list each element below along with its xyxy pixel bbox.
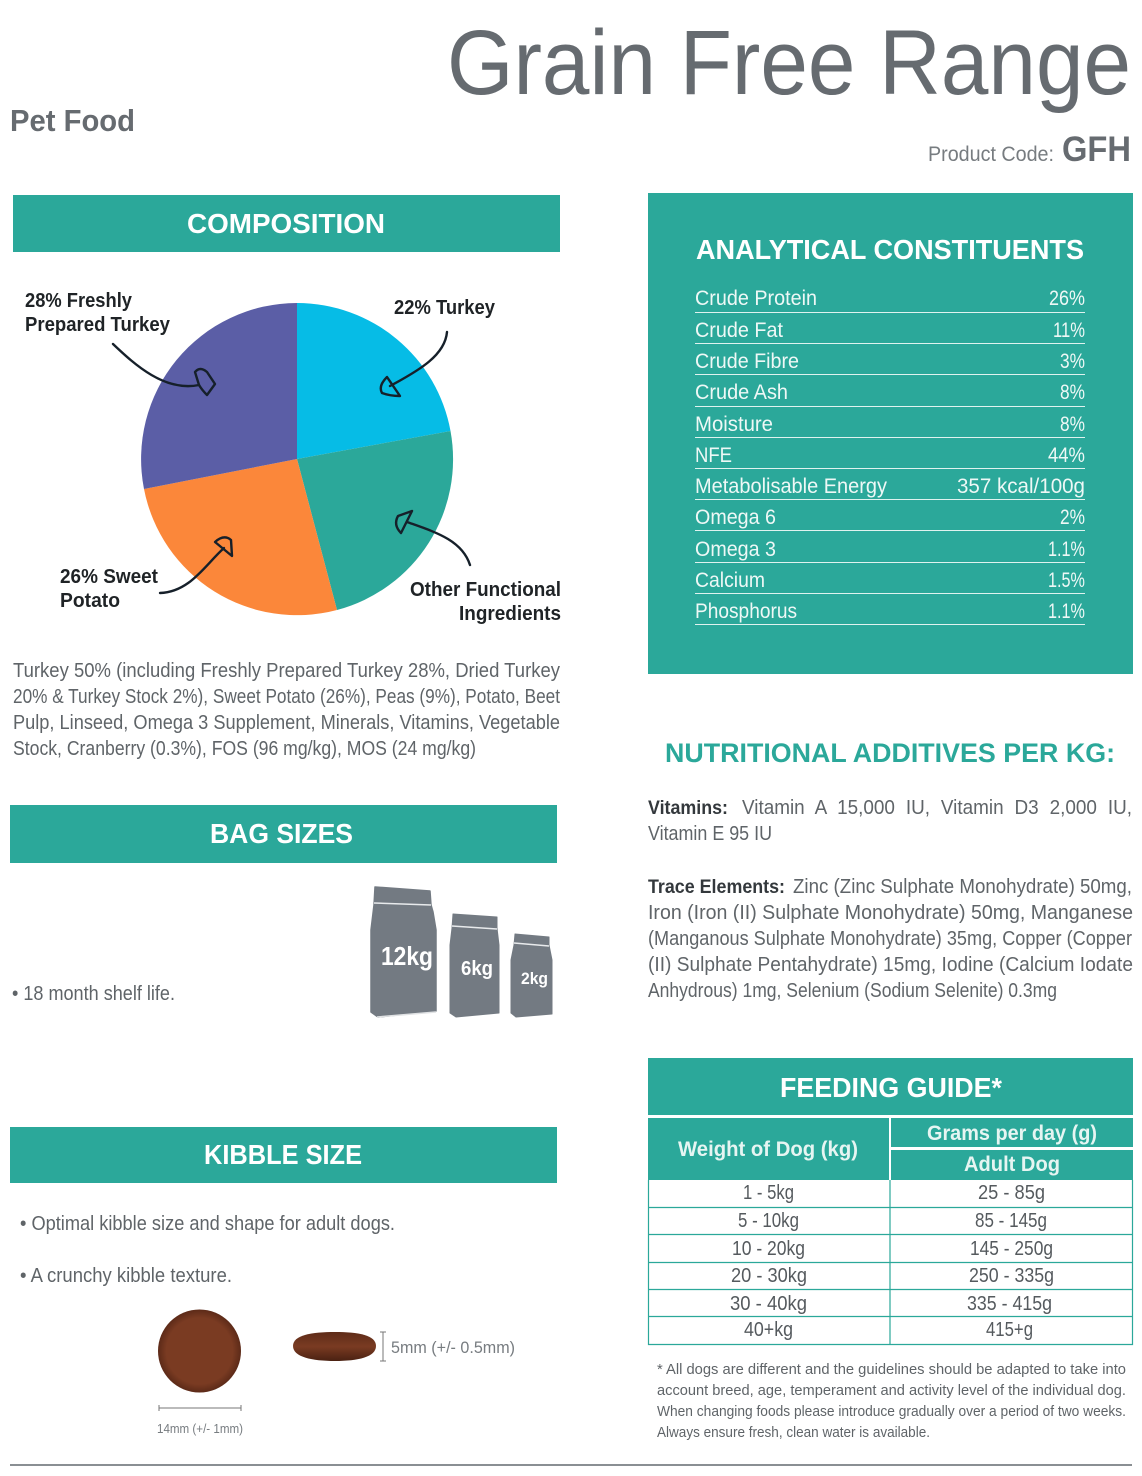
constituents table bbox=[695, 287, 1085, 624]
arrow: other functional ingredients bbox=[396, 511, 470, 565]
vitamins text: Vitamins: bbox=[648, 798, 728, 819]
feeding guide footnote bbox=[657, 1362, 1126, 1441]
brand label: Pet Food: Pet Food bbox=[10, 103, 135, 138]
feeding guide heading bbox=[648, 1058, 1133, 1115]
composition ingredients text: Turkey 50% (including Freshly Prepared Turkey 28%, Dried Turkey bbox=[13, 660, 560, 682]
icon: 2kg bag: 2kg bbox=[521, 969, 548, 988]
constituents table: Crude Ash bbox=[695, 381, 788, 404]
icon: 12kg bag bbox=[371, 887, 436, 1017]
constituents table: 1.1% bbox=[1048, 600, 1085, 623]
bag sizes heading: BAG SIZES bbox=[210, 818, 353, 849]
feeding guide heading: FEEDING GUIDE* bbox=[780, 1072, 1002, 1103]
constituents table: 357 kcal/100g bbox=[957, 475, 1085, 498]
feeding table rows: 25 - 85g bbox=[978, 1182, 1045, 1204]
icon: kibble side view bbox=[293, 1332, 376, 1361]
composition ingredients text: Pulp, Linseed, Omega 3 Supplement, Minerals, Vitamins, Vegetable bbox=[13, 712, 560, 734]
feeding guide footnote: When changing foods please introduce gradually over a period of two weeks. bbox=[657, 1404, 1126, 1420]
feeding table rows: 40+kg bbox=[744, 1319, 793, 1341]
vitamins text bbox=[648, 797, 1132, 845]
constituents table: Metabolisable Energy bbox=[695, 475, 887, 498]
composition ingredients text: 20% & Turkey Stock 2%), Sweet Potato (26%), Peas (9%), Potato, Beet bbox=[13, 686, 560, 708]
composition heading bbox=[13, 195, 560, 252]
label: 28% freshly prepared turkey bbox=[25, 290, 171, 336]
label: 28% freshly prepared turkey: Prepared Turkey bbox=[25, 314, 171, 336]
constituents table: 44% bbox=[1048, 444, 1085, 467]
constituents table: NFE bbox=[695, 444, 732, 467]
panel: bag sizes bbox=[10, 805, 557, 1017]
kibble bullet points: • A crunchy kibble texture. bbox=[20, 1265, 232, 1287]
feeding table header: Adult Dog bbox=[964, 1153, 1060, 1176]
height dimension bbox=[380, 1332, 515, 1361]
constituents table: 3% bbox=[1060, 350, 1085, 373]
constituents table: Omega 6 bbox=[695, 506, 776, 529]
constituents table: Moisture bbox=[695, 413, 773, 436]
pie chart bbox=[141, 303, 453, 615]
feeding table rows: 30 - 40kg bbox=[730, 1293, 807, 1315]
trace elements text: Trace Elements: bbox=[648, 877, 785, 898]
composition ingredients text bbox=[13, 660, 560, 760]
label: other functional ingredients: Other Functional bbox=[410, 579, 561, 601]
constituents table: Crude Protein bbox=[695, 287, 817, 310]
nutritional additives heading: NUTRITIONAL ADDITIVES PER KG: bbox=[665, 738, 1115, 768]
feeding table header: Grams per day (g) bbox=[927, 1122, 1097, 1145]
constituents table: Calcium bbox=[695, 569, 765, 592]
panel: feeding guide bbox=[648, 1058, 1133, 1441]
kibble size heading: KIBBLE SIZE bbox=[204, 1139, 362, 1170]
feeding guide footnote: Always ensure fresh, clean water is available. bbox=[657, 1425, 930, 1441]
composition heading: COMPOSITION bbox=[187, 208, 385, 239]
feeding table header bbox=[648, 1118, 1133, 1180]
feeding table rows: 1 - 5kg bbox=[743, 1182, 794, 1204]
constituents table: 26% bbox=[1049, 287, 1085, 310]
analytical heading: ANALYTICAL CONSTITUENTS bbox=[696, 234, 1084, 265]
constituents table: 2% bbox=[1060, 506, 1085, 529]
constituents table: 1.5% bbox=[1048, 569, 1085, 592]
constituents table: 11% bbox=[1053, 319, 1085, 342]
kibble size heading bbox=[10, 1127, 557, 1183]
vitamins text: Vitamin E 95 IU bbox=[648, 823, 772, 845]
width dimension: 14mm (+/- 1mm) bbox=[157, 1421, 243, 1436]
constituents table: Phosphorus bbox=[695, 600, 797, 623]
icon: 12kg bag: 12kg bbox=[381, 941, 433, 971]
icon: kibble top view bbox=[158, 1310, 241, 1392]
constituents table: Crude Fat bbox=[695, 319, 783, 342]
feeding guide footnote: * All dogs are different and the guidelines should be adapted to take into bbox=[657, 1362, 1126, 1378]
label: other functional ingredients bbox=[410, 579, 561, 625]
label: 26% sweet potato: Potato bbox=[60, 590, 120, 612]
icon: 6kg bag bbox=[450, 914, 499, 1017]
icon: 2kg bag bbox=[511, 934, 552, 1017]
label: 26% sweet potato bbox=[60, 566, 158, 612]
label: 26% sweet potato: 26% Sweet bbox=[60, 566, 158, 588]
trace elements text bbox=[648, 876, 1133, 1002]
bag sizes heading bbox=[10, 805, 557, 863]
panel: nutritional additives bbox=[648, 738, 1133, 1002]
trace elements text: (II) Sulphate Pentahydrate) 15mg, Iodine (Calcium Iodate bbox=[648, 954, 1133, 976]
product code bbox=[928, 130, 1131, 169]
feeding table rows bbox=[648, 1180, 1133, 1344]
panel: analytical constituents bbox=[648, 193, 1133, 674]
kibble bullet points: • Optimal kibble size and shape for adult dogs. bbox=[20, 1213, 395, 1235]
icon: 6kg bag: 6kg bbox=[461, 958, 493, 980]
composition ingredients text: Stock, Cranberry (0.3%), FOS (96 mg/kg), MOS (24 mg/kg) bbox=[13, 738, 476, 760]
feeding table rows: 10 - 20kg bbox=[732, 1238, 805, 1260]
height dimension: 5mm (+/- 0.5mm) bbox=[391, 1338, 515, 1357]
feeding table header: Weight of Dog (kg) bbox=[678, 1138, 858, 1161]
label: other functional ingredients: Ingredients bbox=[459, 603, 561, 625]
feeding table rows: 415+g bbox=[986, 1319, 1033, 1341]
trace elements text: Iron (Iron (II) Sulphate Monohydrate) 50mg, Manganese bbox=[648, 902, 1133, 924]
constituents table: 1.1% bbox=[1048, 538, 1085, 561]
product code: Product Code: bbox=[928, 143, 1054, 166]
shelf life text: • 18 month shelf life. bbox=[12, 983, 175, 1005]
label: 22% turkey: 22% Turkey bbox=[394, 297, 496, 319]
feeding table rows: 20 - 30kg bbox=[731, 1265, 807, 1287]
kibble bullet points bbox=[20, 1213, 395, 1287]
feeding table rows: 250 - 335g bbox=[969, 1265, 1054, 1287]
trace elements text: Anhydrous) 1mg, Selenium (Sodium Selenite) 0.3mg bbox=[648, 980, 1057, 1002]
product code: GFH bbox=[1062, 130, 1131, 169]
panel: kibble size bbox=[10, 1127, 557, 1436]
arrow: sweet potato bbox=[160, 537, 232, 593]
arrow: freshly prepared turkey bbox=[113, 344, 215, 395]
constituents table: 8% bbox=[1060, 381, 1085, 404]
arrow: turkey bbox=[381, 332, 447, 396]
feeding table rows: 85 - 145g bbox=[975, 1210, 1047, 1232]
feeding guide footnote: account breed, age, temperament and activity level of the individual dog. bbox=[657, 1383, 1126, 1399]
constituents table: Omega 3 bbox=[695, 538, 776, 561]
width dimension bbox=[157, 1405, 243, 1436]
feeding table rows: 335 - 415g bbox=[967, 1293, 1052, 1315]
constituents table: 8% bbox=[1060, 413, 1085, 436]
feeding table rows: 5 - 10kg bbox=[738, 1210, 799, 1232]
constituents table: Crude Fibre bbox=[695, 350, 799, 373]
panel: composition bbox=[13, 195, 561, 760]
feeding table rows: 145 - 250g bbox=[970, 1238, 1053, 1260]
label: 28% freshly prepared turkey: 28% Freshly bbox=[25, 290, 133, 312]
